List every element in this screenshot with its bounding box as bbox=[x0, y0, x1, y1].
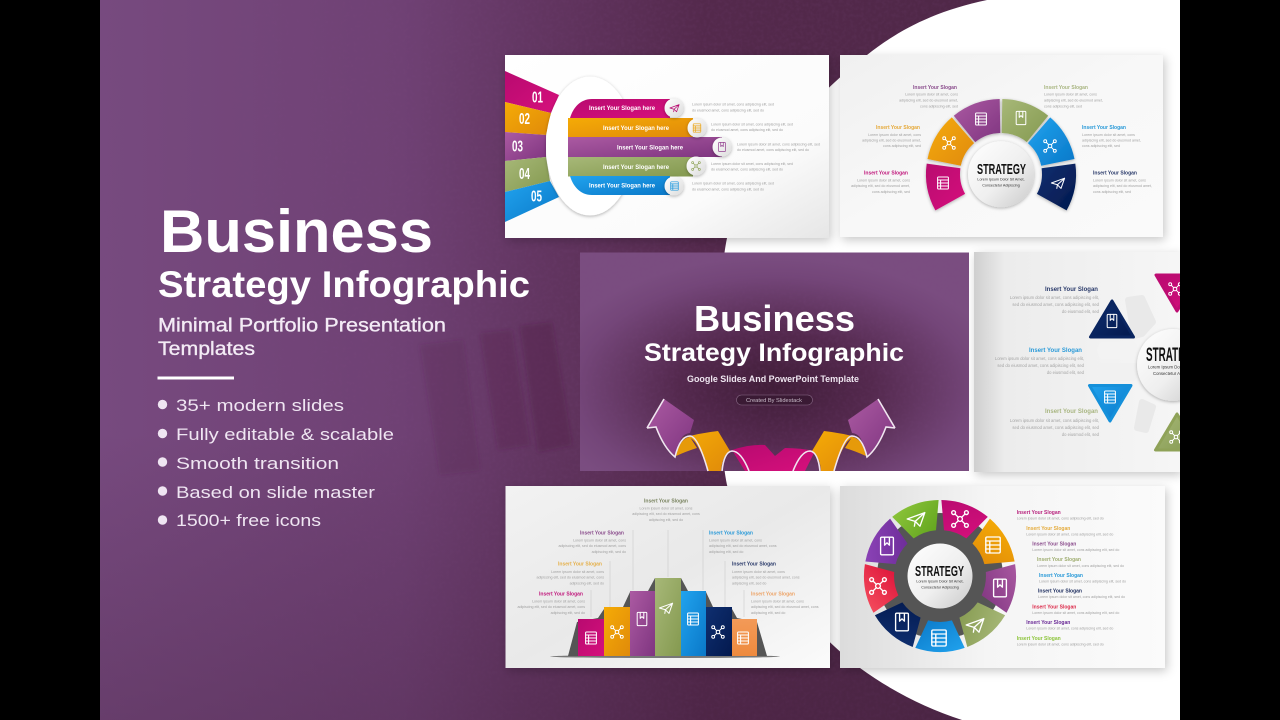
fan labels left: Insert Your Slogan bbox=[876, 125, 920, 131]
fan labels right: Lorem ipsum dolor sit amet, cons bbox=[1082, 133, 1135, 137]
ribbon descriptions: do eiusmod amet, cons adipiscing elit, sed do bbox=[692, 188, 764, 192]
ribbon descriptions bbox=[692, 102, 820, 192]
cover caption: Google Slides And PowerPoint Template bbox=[687, 374, 859, 384]
left labels bbox=[517, 530, 626, 615]
top label: adipiscing elit, sed do eiusmod amet, cons bbox=[632, 512, 700, 516]
ribbon descriptions: Lorem ipsum dolor sit amet, cons adipiscing elit, sed bbox=[737, 142, 820, 146]
left labels: adipiscing elit, sed do bbox=[592, 550, 626, 554]
leader lines bbox=[591, 530, 744, 617]
number wedges: 02 bbox=[519, 111, 530, 128]
ribbon arrow right bbox=[793, 399, 895, 471]
wheel label list: Insert Your Slogan bbox=[1039, 573, 1083, 579]
fan labels right: adipiscing elit, sed do eiusmod amet, bbox=[1093, 184, 1152, 188]
pyramid back bbox=[568, 578, 767, 656]
triangle labels: Lorem ipsum dolor sit amet, cons adipiscing elit, bbox=[995, 356, 1084, 361]
ribbon descriptions: do eiusmod amet, cons adipiscing elit, sed do bbox=[692, 108, 764, 112]
right labels: Insert Your Slogan bbox=[751, 592, 795, 598]
right labels: Lorem ipsum dolor sit amet, cons bbox=[751, 600, 804, 604]
top label: Lorem ipsum dolor sit amet, cons bbox=[640, 506, 693, 510]
bar icons bbox=[586, 603, 748, 644]
ribbon descriptions: Lorem ipsum dolor sit amet, cons adipiscing elit, sed bbox=[692, 182, 774, 186]
wheel hub bbox=[908, 544, 972, 608]
fan labels left: Lorem ipsum dolor sit amet, cons bbox=[868, 133, 921, 137]
wheel hub: Lorem Ipsum Dolor Sit Amet, bbox=[916, 580, 964, 584]
number wedges bbox=[505, 71, 559, 222]
panel: pyramid bar slide bbox=[506, 486, 830, 668]
top label: adipiscing elit, sed do bbox=[649, 518, 683, 522]
panel: cover slide bbox=[580, 252, 969, 471]
triangles bbox=[1090, 275, 1200, 450]
magenta ribbon centre bbox=[732, 445, 815, 471]
wheel segments bbox=[861, 496, 1019, 652]
fan labels right bbox=[1044, 85, 1152, 194]
fan labels right: Insert Your Slogan bbox=[1082, 125, 1126, 131]
fan labels left: cons adipiscing elit, sed bbox=[883, 144, 921, 148]
center hub: STRATEGY bbox=[1146, 345, 1199, 366]
triangle icons bbox=[1105, 283, 1182, 443]
center hub: Lorem Ipsum Dolor Sit Amet, bbox=[977, 178, 1025, 182]
wheel label list: Insert Your Slogan bbox=[1017, 510, 1061, 516]
fan labels right: cons adipiscing elit, sed bbox=[1093, 190, 1131, 194]
fan labels left: Insert Your Slogan bbox=[913, 85, 957, 91]
right labels: adipiscing elit, sed do bbox=[732, 582, 766, 586]
left labels: Lorem ipsum dolor sit amet, cons bbox=[573, 538, 626, 542]
top label bbox=[632, 498, 700, 522]
subtitle: Strategy Infographic: Strategy Infographic bbox=[158, 264, 530, 305]
wheel hub: Consectetur Adipiscing bbox=[921, 586, 959, 590]
wheel label list: Lorem ipsum dolor sit amet, cons adipiscing elit, sed do bbox=[1032, 548, 1119, 552]
ribbons: Insert Your Slogan here bbox=[603, 164, 669, 171]
left labels: adipiscing elit, sed do bbox=[551, 611, 585, 615]
center hub bbox=[968, 141, 1034, 207]
triangle labels: do eiusmod elit, sed bbox=[1062, 309, 1100, 314]
ribbons bbox=[568, 99, 722, 195]
tagline: Templates bbox=[158, 338, 255, 360]
center hub bbox=[1137, 329, 1209, 401]
wheel label list: Lorem ipsum dolor sit amet, cons adipiscing elit, sed do bbox=[1026, 626, 1113, 630]
top label: Insert Your Slogan bbox=[644, 498, 688, 504]
feature list bbox=[158, 396, 394, 530]
white ellipse bbox=[546, 76, 634, 216]
feature list: Smooth transition bbox=[176, 454, 339, 473]
right labels: adipiscing elit, sed do eiusmod amet, cons bbox=[709, 544, 777, 548]
fan icons bbox=[938, 111, 1065, 189]
wheel label list: Lorem ipsum dolor sit amet, cons adipiscing elit, sed do bbox=[1037, 564, 1124, 568]
fan labels right: Lorem ipsum dolor sit amet, cons bbox=[1093, 178, 1146, 182]
credit pill bbox=[736, 395, 812, 405]
panel: numbered ribbon slide bbox=[505, 55, 829, 238]
title block bbox=[158, 198, 530, 360]
fan segments bbox=[926, 99, 1076, 210]
triangle labels bbox=[995, 286, 1100, 437]
left labels: adipiscing elit, sed do bbox=[570, 582, 604, 586]
number wedges: 03 bbox=[512, 138, 523, 156]
triangle labels: do eiusmod elit, sed bbox=[1062, 432, 1100, 437]
fan labels left: cons adipiscing elit, sed bbox=[920, 104, 958, 108]
wheel label list: Insert Your Slogan bbox=[1017, 636, 1061, 642]
wheel label list: Lorem ipsum dolor sit amet, cons adipiscing elit, sed do bbox=[1039, 580, 1126, 584]
left labels: adipiscing elit, sed do eiusmod amet, cons bbox=[558, 544, 626, 548]
ribbon icon circles bbox=[664, 98, 732, 196]
left labels: Insert Your Slogan bbox=[580, 530, 624, 536]
wheel label list: Lorem ipsum dolor sit amet, cons adipiscing elit, sed do bbox=[1032, 611, 1119, 615]
ribbon descriptions: do eiusmod amet, cons adipiscing elit, sed do bbox=[711, 128, 783, 132]
white curved shape bbox=[719, 0, 1180, 720]
title: Business: Business bbox=[160, 198, 433, 265]
triangle labels: Lorem ipsum dolor sit amet, cons adipiscing elit, bbox=[1010, 295, 1099, 300]
ribbons: Insert Your Slogan here bbox=[617, 144, 683, 152]
ribbon arrow left bbox=[647, 399, 749, 471]
right labels: Lorem ipsum dolor sit amet, cons bbox=[732, 570, 785, 574]
ribbon descriptions: Lorem ipsum dolor sit amet, cons adipiscing elit, sed bbox=[711, 122, 793, 126]
feature list: Fully editable & scalable bbox=[176, 425, 394, 444]
ribbons: Insert Your Slogan here bbox=[603, 125, 669, 132]
left labels: Insert Your Slogan bbox=[539, 592, 583, 598]
credit pill: Created By Slidestack bbox=[746, 398, 802, 404]
panel: nine segment wheel slide bbox=[840, 486, 1165, 668]
fan labels right: adipiscing elit, sed do eiusmod amet, bbox=[1082, 138, 1141, 142]
triangle labels: sed do eiusmod amet, cons adipiscing elit, sed bbox=[1012, 302, 1100, 307]
fan labels left: cons adipiscing elit, sed bbox=[872, 190, 910, 194]
fan labels left: Lorem ipsum dolor sit amet, cons bbox=[857, 178, 910, 182]
ribbons: Insert Your Slogan here bbox=[589, 105, 655, 112]
wheel label list: Insert Your Slogan bbox=[1032, 542, 1077, 548]
wheel label list: Insert Your Slogan bbox=[1026, 620, 1071, 626]
fan labels left: adipiscing elit, sed do eiusmod amet, bbox=[899, 98, 958, 102]
center hub: Consectetur Adipiscing bbox=[1153, 371, 1197, 376]
triangle labels: Insert Your Slogan bbox=[1029, 347, 1082, 354]
right labels: adipiscing elit, sed do bbox=[751, 611, 785, 615]
left labels: adipiscing elit, sed do eiusmod amet, cons bbox=[517, 605, 585, 609]
fan labels left: adipiscing elit, sed do eiusmod amet, bbox=[862, 138, 921, 142]
ribbons: Insert Your Slogan here bbox=[589, 182, 655, 190]
number wedges: 01 bbox=[532, 90, 543, 106]
left labels: Insert Your Slogan bbox=[558, 562, 602, 568]
right labels bbox=[709, 530, 819, 615]
number wedges: 04 bbox=[519, 166, 530, 183]
number wedges: 05 bbox=[531, 188, 542, 206]
triangle labels: sed do eiusmod amet, cons adipiscing elit, sed bbox=[997, 363, 1085, 368]
left labels: adipiscing elit, sed do eiusmod amet, cons bbox=[536, 576, 604, 580]
wheel label list: Insert Your Slogan bbox=[1026, 526, 1071, 532]
center hub: STRATEGY bbox=[977, 161, 1026, 178]
ribbon descriptions: do eiusmod amet, cons adipiscing elit, sed do bbox=[711, 168, 783, 172]
right labels: adipiscing elit, sed do eiusmod amet, cons bbox=[732, 576, 800, 580]
right labels: Insert Your Slogan bbox=[709, 530, 753, 536]
ribbon descriptions: do eiusmod amet, cons adipiscing elit, sed do bbox=[737, 148, 809, 152]
wheel label list: Lorem ipsum dolor sit amet, cons adipiscing elit, sed do bbox=[1026, 532, 1113, 536]
triangle labels: do eiusmod elit, sed bbox=[1047, 370, 1085, 375]
wheel hub: STRATEGY bbox=[915, 563, 964, 580]
left labels: Lorem ipsum dolor sit amet, cons bbox=[551, 570, 604, 574]
gear bbox=[877, 513, 1003, 639]
tagline: Minimal Portfolio Presentation bbox=[158, 314, 446, 336]
wheel label list: Insert Your Slogan bbox=[1032, 604, 1077, 610]
wheel label list: Lorem ipsum dolor sit amet, cons adipiscing elit, sed do bbox=[1017, 642, 1104, 646]
ribbon descriptions: Lorem ipsum dolor sit amet, cons adipiscing elit, sed bbox=[692, 102, 774, 106]
triangle labels: Insert Your Slogan bbox=[1045, 408, 1098, 415]
fan labels right: Lorem ipsum dolor sit amet, cons bbox=[1044, 92, 1097, 96]
left labels: Lorem ipsum dolor sit amet, cons bbox=[532, 600, 585, 604]
wheel label list: Lorem ipsum dolor sit amet, cons adipiscing elit, sed do bbox=[1017, 516, 1104, 520]
tagline bbox=[158, 314, 446, 360]
fan labels left: Insert Your Slogan bbox=[864, 170, 908, 176]
fan labels left: adipiscing elit, sed do eiusmod amet, bbox=[851, 184, 910, 188]
ground shadow bbox=[550, 655, 780, 658]
wheel icons bbox=[870, 511, 1006, 646]
triangle labels: Insert Your Slogan bbox=[1045, 286, 1098, 293]
wheel label list: Insert Your Slogan bbox=[1038, 588, 1082, 594]
ribbon descriptions: Lorem ipsum dolor sit amet, cons adipiscing elit, sed bbox=[711, 162, 793, 166]
center hub: Consectetur Adipiscing bbox=[982, 184, 1020, 188]
fan labels right: adipiscing elit, sed do eiusmod amet, bbox=[1044, 98, 1103, 102]
fan labels right: Insert Your Slogan bbox=[1093, 170, 1137, 176]
right labels: adipiscing elit, sed do bbox=[709, 550, 743, 554]
wheel label list: Insert Your Slogan bbox=[1037, 557, 1081, 563]
right labels: adipiscing elit, sed do eiusmod amet, cons bbox=[751, 605, 819, 609]
right labels: Insert Your Slogan bbox=[732, 562, 776, 568]
fan labels right: cons adipiscing elit, sed bbox=[1082, 144, 1120, 148]
divider bbox=[158, 376, 234, 380]
feature list: 35+ modern slides bbox=[176, 396, 344, 415]
fan labels right: Insert Your Slogan bbox=[1044, 85, 1088, 91]
fan labels left bbox=[851, 85, 958, 194]
triangle labels: Lorem ipsum dolor sit amet, cons adipiscing elit, bbox=[1010, 418, 1099, 423]
wheel label list bbox=[1017, 510, 1126, 646]
panel: strategy half wheel slide bbox=[840, 55, 1163, 237]
wheel label list: Lorem ipsum dolor sit amet, cons adipiscing elit, sed do bbox=[1038, 595, 1125, 599]
fan labels left: Lorem ipsum dolor sit amet, cons bbox=[905, 92, 958, 96]
pale petals bbox=[1100, 298, 1153, 430]
right labels: Lorem ipsum dolor sit amet, cons bbox=[709, 538, 762, 542]
cover subtitle: Strategy Infographic bbox=[644, 339, 904, 367]
cover title: Business bbox=[694, 298, 855, 339]
fan labels right: cons adipiscing elit, sed bbox=[1044, 104, 1082, 108]
panel: hexagon triangles slide bbox=[974, 252, 1209, 472]
feature list: 1500+ free icons bbox=[176, 511, 321, 530]
bars bbox=[578, 578, 757, 656]
feature list: Based on slide master bbox=[176, 483, 375, 502]
center hub: Lorem Ipsum Dolor bbox=[1148, 364, 1185, 370]
triangle labels: sed do eiusmod amet, cons adipiscing elit, sed bbox=[1012, 425, 1100, 430]
